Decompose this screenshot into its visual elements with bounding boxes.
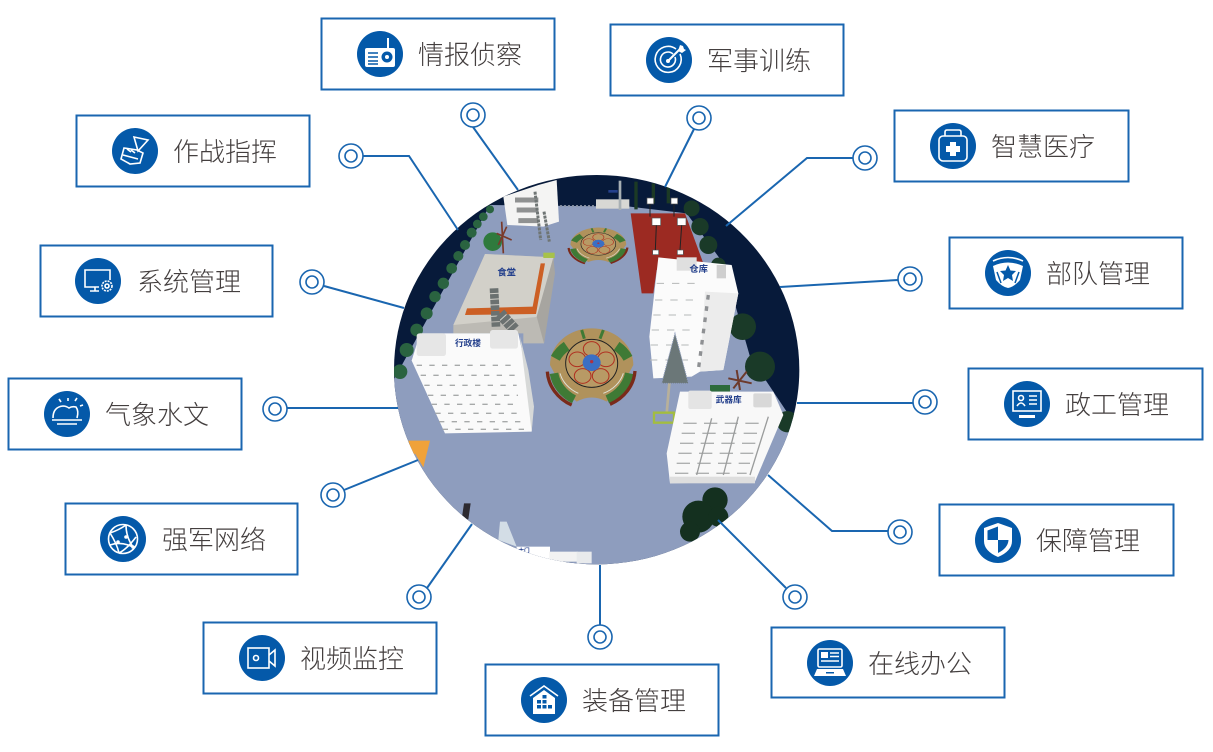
icon: sun over water (44, 391, 90, 437)
label: 智慧医疗 (991, 132, 1095, 162)
armory (667, 391, 783, 483)
panel: 气象水文 (8, 378, 242, 450)
ground (390, 205, 803, 570)
top building (503, 180, 559, 242)
red sports court (631, 213, 703, 293)
icon: military badge (985, 250, 1031, 296)
panel: 强军网络 (66, 504, 298, 574)
icon: radio (357, 31, 403, 77)
big plaza (547, 328, 635, 405)
small plaza (569, 228, 627, 264)
label: 强军网络 (162, 525, 266, 555)
car (462, 503, 471, 519)
label: 系统管理 (137, 267, 241, 297)
icon: video camera (239, 635, 285, 681)
small tree near canteen (483, 232, 502, 251)
panel: 在线办公 (772, 628, 1004, 698)
label: 视频监控 (300, 644, 404, 674)
armory: 武器库 (716, 394, 742, 405)
left tree row (393, 205, 494, 379)
admin building: 行政楼 (455, 337, 481, 348)
panel: 智慧医疗 (894, 110, 1128, 182)
canteen: 食堂 (497, 267, 516, 278)
label: 部队管理 (1046, 259, 1150, 289)
label: 保障管理 (1036, 526, 1140, 556)
icon: monitor with gear (75, 258, 121, 304)
central campus scene (390, 170, 803, 570)
orange vehicle (408, 441, 430, 467)
icon: network globe (100, 516, 146, 562)
warehouse (649, 257, 738, 378)
panel: 系统管理 (40, 246, 272, 316)
icon: ID monitor (1004, 381, 1050, 427)
connectors (287, 127, 913, 625)
label: 情报侦察 (418, 40, 522, 70)
label: 作战指挥 (173, 137, 277, 167)
warehouse: 仓库 (689, 263, 708, 274)
label: 军事训练 (707, 46, 811, 76)
panel: 作战指挥 (76, 116, 310, 186)
tree with planter (654, 333, 688, 423)
panel: 视频监控 (204, 622, 436, 694)
label: 在线办公 (868, 649, 972, 679)
label: 气象水文 (105, 400, 209, 430)
icon: shield (975, 517, 1021, 563)
panel: 情报侦察 (322, 18, 554, 90)
icon: medical kit (930, 123, 976, 169)
gate (596, 199, 629, 209)
right trees (684, 200, 798, 432)
panel: 政工管理 (968, 368, 1202, 440)
icon: warehouse house (521, 677, 567, 723)
icon: command flag (112, 128, 158, 174)
icon: target (646, 37, 692, 83)
brown tree (728, 370, 752, 390)
icon: laptop (807, 640, 853, 686)
canteen (453, 253, 555, 343)
label: 装备管理 (582, 686, 686, 716)
admin building (412, 330, 534, 433)
dark tree at bottom (680, 487, 728, 542)
panel: 保障管理 (940, 504, 1174, 576)
panel: 军事训练 (610, 24, 844, 96)
panel: 部队管理 (950, 238, 1182, 308)
panel: 装备管理 (486, 664, 718, 736)
bottom gate buildings: 大门 (518, 547, 530, 555)
label: 政工管理 (1065, 390, 1169, 420)
bottom gate buildings (498, 522, 592, 563)
ring markers (263, 103, 937, 649)
